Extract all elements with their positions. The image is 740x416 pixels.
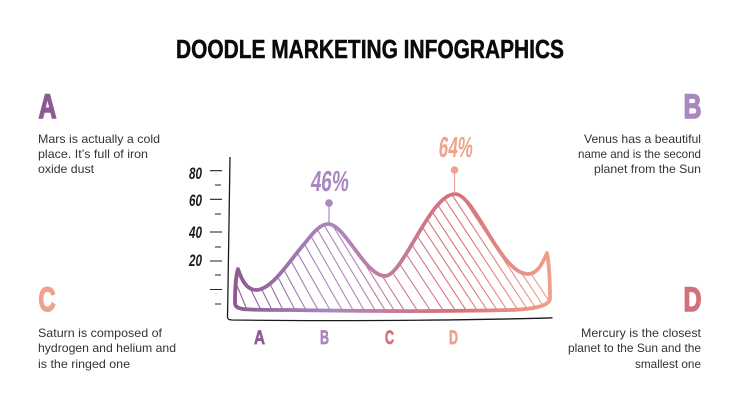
text block: Venus: name and is the second [578, 147, 701, 161]
x axis labels: B [320, 328, 329, 349]
marker: 64% [437, 132, 475, 193]
text block: Venus [578, 132, 701, 176]
heading: C: C [38, 281, 56, 319]
text block: Venus: Venus has a beautiful [584, 132, 701, 146]
marker: 46%: 46% [309, 166, 351, 198]
text block: Mars: oxide dust [38, 162, 95, 176]
y axis labels: 60 [189, 191, 202, 210]
text block: Venus: planet from the Sun [594, 162, 701, 176]
text block: Mercury: Mercury is the closest [581, 326, 702, 340]
y axis labels [188, 164, 202, 270]
text block: Saturn: hydrogen and helium and [38, 341, 176, 355]
panel: D [568, 281, 702, 371]
panel: A [38, 88, 160, 176]
x axis labels [254, 328, 458, 349]
text block: Mars: place. It’s full of iron [38, 147, 148, 161]
heading: D: D [684, 281, 702, 319]
text block: Saturn [38, 326, 176, 371]
text block: Saturn: is the ringed one [38, 357, 130, 371]
y axis ticks [210, 171, 222, 304]
x axis labels: C [385, 328, 394, 349]
hatching [237, 196, 548, 310]
chart: hand-drawn area chart [188, 132, 555, 349]
text block: Mercury: planet to the Sun and the [568, 341, 701, 355]
y axis labels: 20 [188, 251, 202, 270]
panel: B [578, 88, 702, 176]
y axis labels: 80 [189, 164, 202, 183]
axes [228, 157, 552, 321]
marker: 64%: 64% [437, 132, 475, 164]
text block: Mercury [568, 326, 702, 371]
heading: B: B [684, 88, 702, 126]
x axis labels: D [449, 328, 458, 349]
y axis labels: 40 [188, 223, 202, 242]
title: DOODLE MARKETING INFOGRAPHICS [176, 34, 564, 64]
infographic canvas [38, 40, 701, 370]
panel: C [38, 281, 176, 371]
marker: 46% [309, 166, 351, 224]
text block: Mars: Mars is actually a cold [38, 132, 160, 146]
text block: Mercury: smallest one [635, 357, 701, 371]
curve [235, 194, 550, 311]
text block: Saturn: Saturn is composed of [38, 326, 163, 340]
heading: A: A [38, 88, 56, 126]
x axis labels: A [254, 328, 265, 349]
text block: Mars [38, 132, 160, 176]
